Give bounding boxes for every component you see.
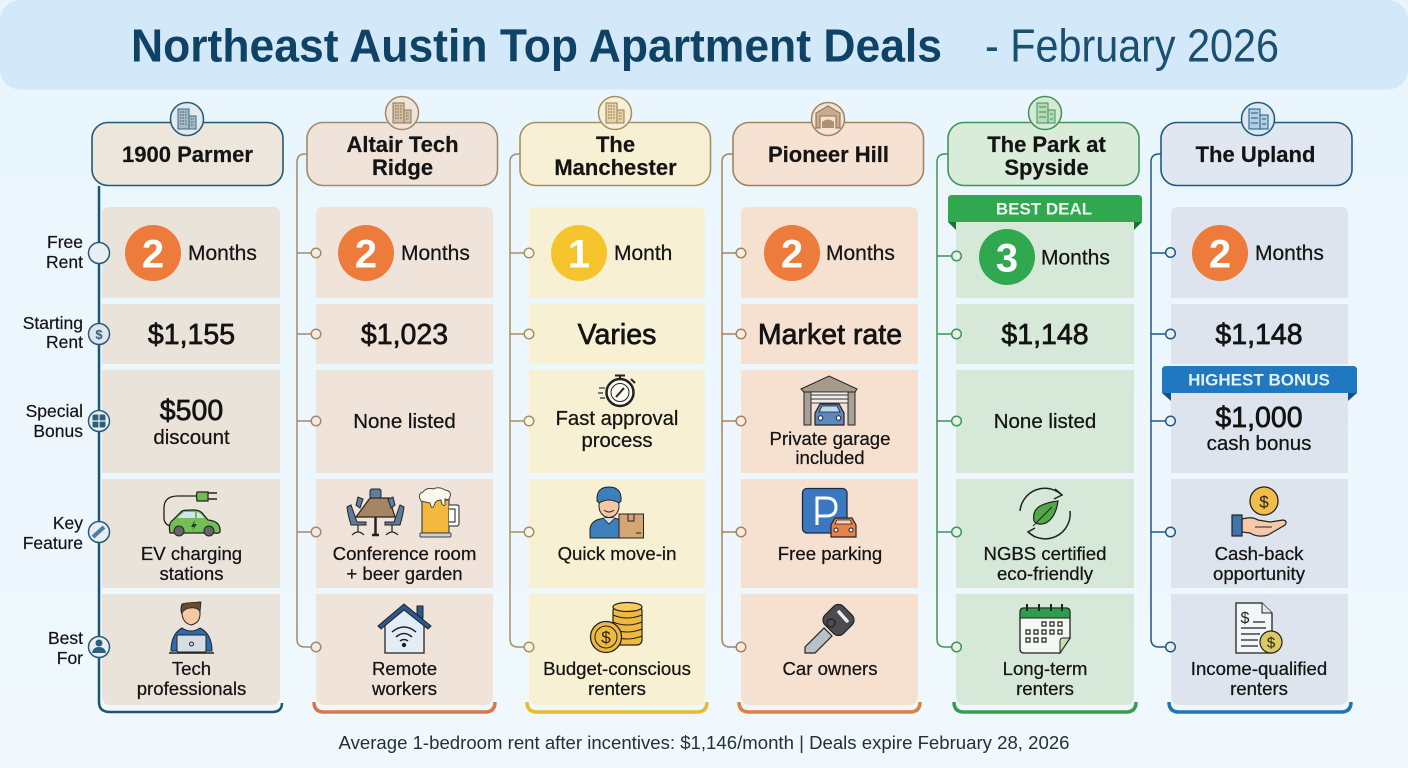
header: Pioneer Hill [733, 122, 924, 186]
label: free rent: Rent [46, 252, 83, 272]
panel: Altair Tech Ridge [297, 96, 498, 712]
header: The Upland [1161, 122, 1352, 186]
best for: long-term renters: renters [1016, 678, 1074, 699]
header: The Upland: The Upland [1196, 142, 1315, 167]
best for: budget-conscious renters: $ [601, 628, 611, 647]
header: The Park at Spyside: The Park at [987, 132, 1106, 157]
connector tree [1151, 154, 1175, 652]
feature: conference room and beer garden: + beer garden [346, 563, 463, 584]
feature: cash-back [1213, 487, 1306, 584]
badge: 3 months [979, 229, 1110, 285]
best for: budget-conscious renters: renters [588, 678, 646, 699]
badge: 2 months: Months [1255, 242, 1324, 265]
bonus: private garage: included [795, 447, 865, 468]
badge: 2 months [1192, 225, 1324, 281]
ribbon: best deal: BEST DEAL [996, 200, 1092, 218]
value: starting rent: Varies [578, 319, 656, 351]
bonus: fast approval: Fast approval [556, 408, 678, 430]
badge: 2 months: 2 [1209, 232, 1231, 276]
value: starting rent: $1,148 [1001, 319, 1089, 351]
value: starting rent: Market rate [758, 319, 902, 351]
best for: remote workers: Remote [372, 658, 437, 679]
best for: car owners [782, 602, 878, 679]
bonus: fast approval [556, 376, 678, 452]
best for: remote workers [371, 604, 437, 699]
feature: cash-back: opportunity [1213, 563, 1306, 584]
feature: eco-friendly: NGBS certified [984, 543, 1106, 564]
best for: tech professionals: professionals [137, 678, 246, 699]
connector tree [937, 154, 961, 652]
best for: income-qualified [1191, 603, 1327, 699]
value: starting rent: $1,155 [148, 319, 235, 351]
label: best for: For [57, 648, 83, 668]
connector tree [722, 154, 746, 652]
feature: cash-back: Cash-back [1215, 543, 1303, 564]
badge: 2 months: 2 [781, 232, 803, 276]
best for: budget-conscious renters [543, 602, 691, 699]
title: Northeast Austin Top Apartment Deals [131, 20, 942, 72]
spine node: free rent [88, 242, 110, 264]
connector tree [297, 154, 321, 652]
column spine [99, 186, 282, 712]
header: 1900 Parmer: 1900 Parmer [122, 142, 253, 167]
label: key feature: Key [53, 513, 83, 533]
title banner [0, 0, 1408, 90]
bonus: private garage: Private garage [770, 428, 890, 449]
label: starting rent: Starting [23, 313, 83, 333]
value: bonus: None listed [353, 410, 456, 433]
label: key feature: Feature [23, 533, 83, 553]
badge: 2 months: Months [188, 242, 257, 265]
spine node: special bonus [88, 410, 110, 432]
badge: 3 months: Months [1041, 246, 1110, 270]
best for: long-term renters: Long-term [1003, 658, 1087, 679]
value: starting rent: $1,148 [1215, 319, 1303, 351]
spine node: best for [88, 636, 110, 658]
best for: income-qualified: Income-qualified [1191, 658, 1327, 679]
feature: conference room and beer garden [333, 488, 476, 584]
row labels [23, 232, 83, 668]
header: The Manchester: The [596, 132, 635, 157]
badge: 2 months [764, 225, 895, 281]
ribbon: best deal [948, 195, 1142, 230]
feature: EV charging [141, 492, 242, 584]
value: bonus: $500 [160, 395, 223, 427]
feature: EV charging: stations [159, 563, 224, 584]
icon: building [598, 96, 632, 130]
bonus: fast approval: process [581, 430, 653, 452]
header: The Manchester [520, 122, 710, 186]
panel: The Manchester [510, 96, 710, 712]
badge: 2 months [125, 225, 257, 281]
best for: income-qualified: renters [1230, 678, 1288, 699]
badge: 2 months: 2 [142, 232, 164, 276]
value: starting rent: $1,023 [361, 319, 448, 351]
header: Altair Tech Ridge: Altair Tech [346, 132, 459, 157]
label: best for: Best [48, 628, 83, 648]
badge: 2 months: Months [826, 242, 895, 265]
icon: garage [812, 102, 844, 136]
value: bonus [153, 395, 230, 449]
panel: 1900 Parmer [88, 102, 283, 712]
panel: The Park at Spyside [937, 96, 1142, 712]
feature: quick move-in: Quick move-in [558, 543, 676, 564]
label: starting rent: Rent [46, 332, 83, 352]
best for: tech professionals [137, 602, 246, 699]
header: Pioneer Hill: Pioneer Hill [768, 142, 889, 167]
best for: income-qualified: $ [1267, 634, 1276, 652]
label: special bonus: Special [26, 401, 83, 421]
feature: eco-friendly: eco-friendly [997, 563, 1094, 584]
connector tree [510, 154, 534, 652]
badge: 1 month [551, 225, 672, 281]
ribbon: highest bonus: HIGHEST BONUS [1188, 370, 1330, 390]
best for: income-qualified: $ [1241, 610, 1250, 627]
badge: 3 months: 3 [996, 236, 1018, 280]
best for: car owners: Car owners [782, 658, 878, 679]
badge: 2 months [338, 225, 470, 281]
icon: building [386, 96, 418, 130]
feature: free parking: Free parking [778, 543, 882, 564]
icon: building [1242, 102, 1274, 136]
header: Altair Tech Ridge [307, 122, 498, 186]
badge: 1 month: 1 [568, 232, 590, 276]
value: bonus [1207, 402, 1311, 455]
value: bonus: None listed [994, 410, 1096, 433]
badge: 1 month: Month [614, 242, 672, 265]
bottom bracket [314, 702, 495, 712]
icon: building [170, 102, 204, 136]
header: The Park at Spyside: Spyside [1004, 155, 1089, 180]
feature: cash-back: $ [1259, 492, 1269, 512]
feature: quick move-in [558, 487, 676, 564]
feature: EV charging: EV charging [141, 543, 242, 564]
bottom bracket [527, 702, 707, 712]
header: The Park at Spyside [948, 122, 1139, 186]
badge: 2 months: Months [401, 242, 470, 265]
value: bonus: cash bonus [1207, 432, 1311, 455]
label: free rent: Free [47, 232, 83, 252]
best for: long-term renters [1003, 604, 1087, 699]
spine node: starting rent: $ [95, 327, 103, 342]
badge: 2 months: 2 [355, 232, 377, 276]
footer note: Average 1-bedroom rent after incentives: $1,146/month | Deals expire February 28, 2026 [338, 733, 1070, 753]
bottom bracket [1169, 702, 1351, 712]
label: special bonus: Bonus [33, 421, 83, 441]
best for: tech professionals: Tech [172, 658, 211, 679]
subtitle date: - February 2026 [985, 20, 1279, 72]
icon: building [1028, 96, 1062, 130]
header: Altair Tech Ridge: Ridge [372, 155, 433, 180]
value: bonus: discount [153, 426, 230, 449]
bottom bracket [954, 702, 1136, 712]
value: bonus: $1,000 [1215, 402, 1303, 434]
panel: The Upland [1151, 102, 1357, 712]
feature: eco-friendly [984, 488, 1106, 584]
header: 1900 Parmer [92, 122, 283, 186]
best for: budget-conscious renters: Budget-conscious [543, 658, 691, 679]
bottom bracket [739, 702, 920, 712]
feature: free parking [778, 488, 882, 564]
bonus: private garage [770, 376, 890, 468]
ribbon: highest bonus [1162, 366, 1357, 401]
best for: remote workers: workers [371, 678, 437, 699]
panel: Pioneer Hill [722, 102, 924, 712]
spine node: starting rent [88, 324, 110, 344]
spine node: key feature [88, 522, 110, 542]
header: The Manchester: Manchester [554, 155, 677, 180]
feature: conference room and beer garden: Conference room [333, 543, 476, 564]
